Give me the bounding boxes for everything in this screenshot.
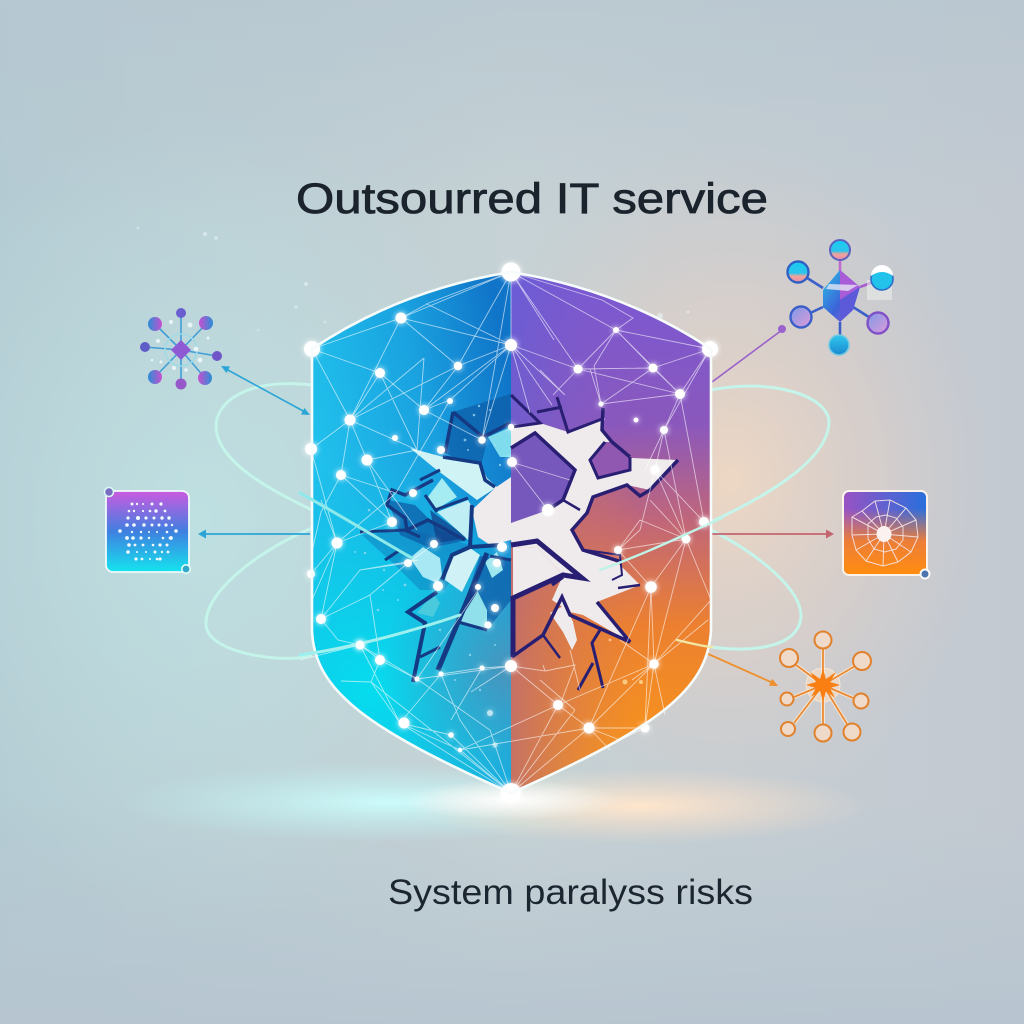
arrow: shield to top-right icon — [712, 325, 786, 382]
icon: left square dot matrix — [104, 488, 190, 573]
crack: light specks — [354, 405, 643, 691]
shield left half — [312, 272, 511, 793]
shield right half — [511, 270, 713, 796]
crack: purple islands — [511, 433, 630, 523]
sparkle particles — [137, 227, 690, 331]
network lines — [300, 272, 711, 793]
arrow: shield to bottom-right icon — [677, 640, 778, 686]
crack: navy fracture lines left — [360, 412, 511, 682]
shield outline — [312, 272, 711, 793]
crack: light shards left — [410, 427, 511, 630]
icon: top-left network — [140, 308, 222, 390]
crack: dark fracture zones — [362, 394, 511, 630]
arrow: shield to right square icon — [712, 530, 834, 538]
arrow: shield to top-left icon — [221, 366, 310, 415]
subtitle: System paralyss risks — [388, 873, 753, 912]
crack: navy fracture lines right — [511, 395, 678, 690]
shield — [300, 262, 718, 803]
icon: bottom-right orange network — [780, 632, 871, 742]
title: Outsourred IT service — [296, 175, 768, 223]
icon: right square web — [843, 491, 930, 578]
icon: top-right gem network — [788, 240, 893, 355]
crack: white break right — [472, 418, 678, 650]
orbit rings in front of shield — [300, 493, 722, 655]
arrow: shield to left square icon — [198, 530, 310, 538]
network nodes — [304, 262, 718, 803]
orbit rings behind shield — [206, 384, 829, 658]
